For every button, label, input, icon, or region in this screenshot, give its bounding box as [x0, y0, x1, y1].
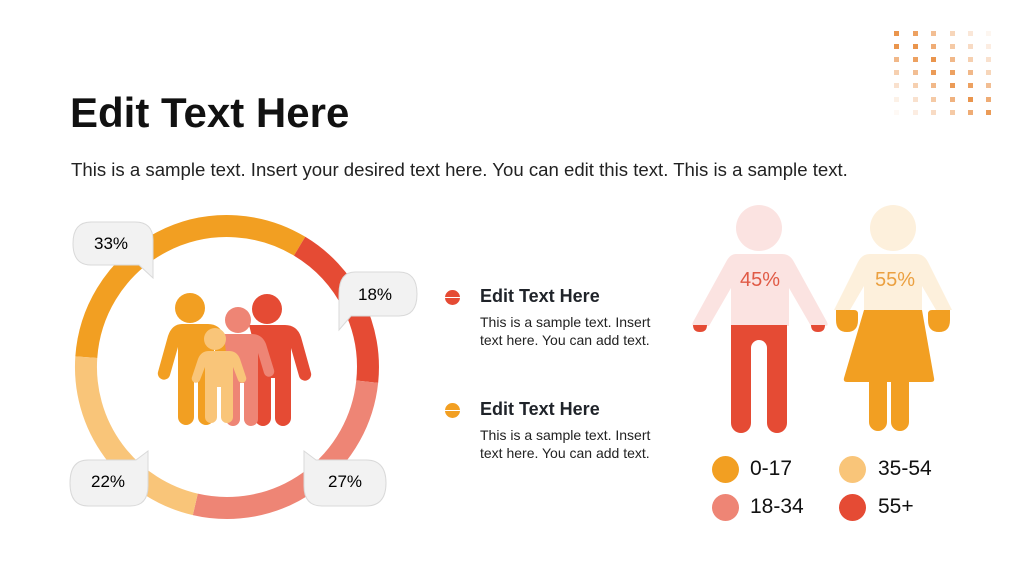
body 1: text here. You can add text. [480, 332, 650, 348]
figure: female 55%: 55% [875, 269, 915, 291]
legend: 18-34 [750, 495, 804, 518]
figure: male 45% [692, 205, 828, 433]
callout: 22%: 22% [91, 472, 125, 491]
text block 2 [445, 399, 650, 461]
legend [712, 456, 932, 521]
bullet orange [445, 403, 460, 418]
legend 18-34 [712, 494, 739, 521]
heading 1: Edit Text Here [480, 286, 600, 306]
legend 35-54 [839, 456, 866, 483]
body 1: This is a sample text. Insert [480, 314, 650, 330]
title: Edit Text Here [70, 89, 349, 136]
subtitle: This is a sample text. Insert your desired text here. You can edit this text. This is a sample text. [71, 159, 848, 180]
legend: 0-17 [750, 457, 792, 480]
figure: male 45%: 45% [740, 269, 780, 291]
body 2 [480, 427, 650, 461]
body 2: This is a sample text. Insert [480, 427, 650, 443]
callout: 22% [70, 450, 148, 506]
callout: 18%: 18% [358, 285, 392, 304]
body 2: text here. You can add text. [480, 445, 650, 461]
figure: female 55% [834, 205, 952, 431]
text block 1 [445, 286, 650, 348]
gender figures [692, 205, 952, 433]
callout: 33% [72, 222, 154, 279]
heading 2: Edit Text Here [480, 399, 600, 419]
callout: 27% [304, 450, 386, 506]
legend: 55+ [878, 495, 914, 518]
bullet red [445, 290, 460, 305]
callout: 18% [338, 272, 418, 332]
callout: 27%: 27% [328, 472, 362, 491]
legend 55+ [839, 494, 866, 521]
legend 0-17 [712, 456, 739, 483]
donut chart [74, 215, 379, 519]
legend: 35-54 [878, 457, 932, 480]
callout: 33%: 33% [94, 234, 128, 253]
body 1 [480, 314, 650, 348]
icon: family [158, 293, 311, 426]
